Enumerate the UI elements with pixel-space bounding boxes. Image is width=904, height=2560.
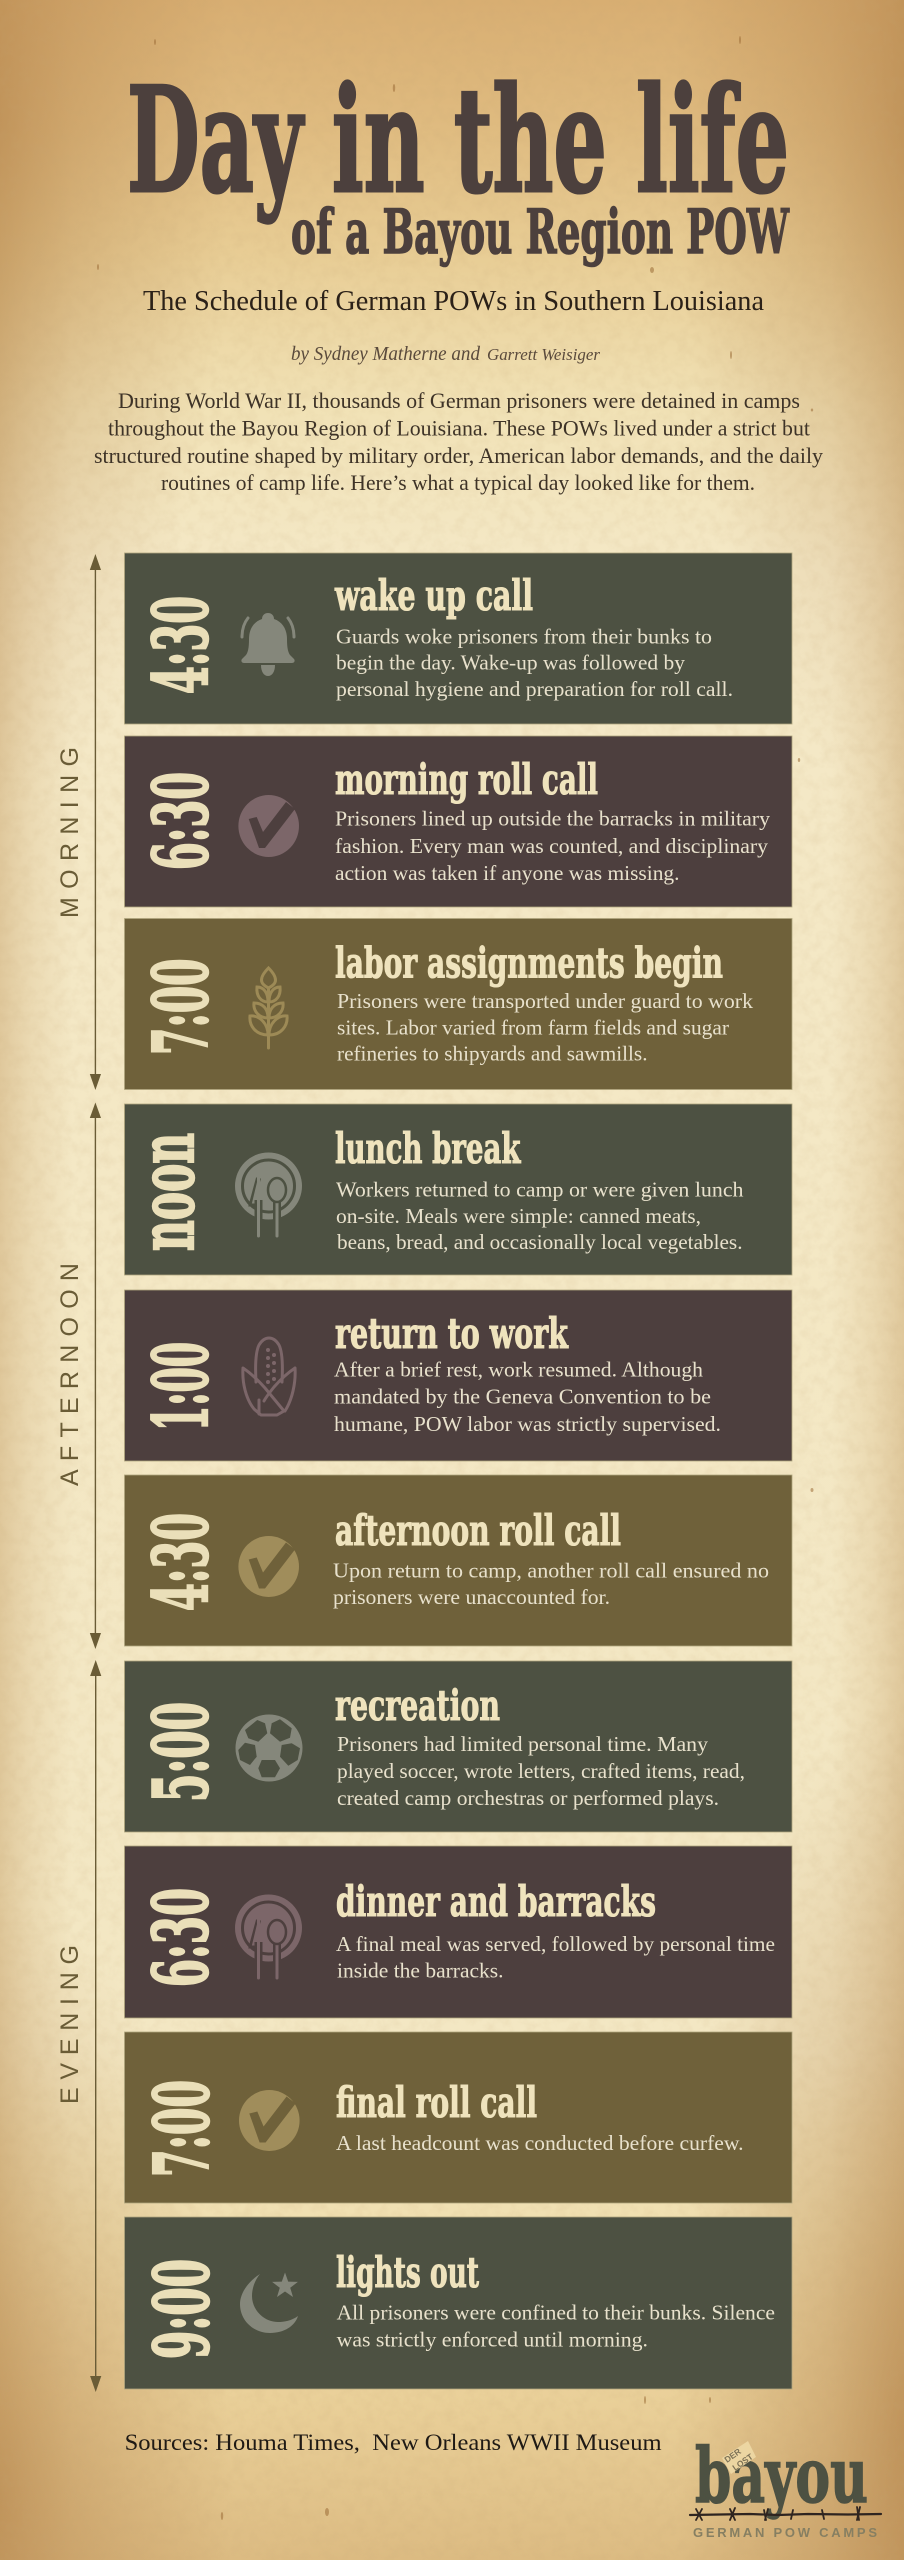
barbed wire (690, 2507, 881, 2520)
icon: check mark (238, 1536, 299, 1597)
panel: final roll call: 7:00 (138, 2080, 226, 2177)
description: created camp orchestras or performed plays. (337, 1786, 719, 1810)
description: action was taken if anyone was missing. (335, 861, 680, 885)
panel: morning roll call: 6:30 (137, 772, 225, 870)
icon: check mark (238, 795, 299, 857)
icon: corn (243, 1338, 295, 1415)
panel: lights out: 9:00 (138, 2259, 226, 2359)
description (337, 1732, 745, 1810)
panel: final roll call (124, 2032, 792, 2203)
icon: wheat (250, 968, 287, 1048)
description (337, 989, 753, 1066)
description: Prisoners had limited personal time. Many (337, 1732, 708, 1756)
arrow: morning (90, 554, 101, 1090)
arrow: afternoon (90, 1102, 101, 1649)
icon: plate and cutlery (235, 1894, 302, 1978)
description (333, 1558, 769, 1609)
description (335, 807, 770, 885)
panel: morning roll call (124, 736, 792, 907)
description: prisoners were unaccounted for. (333, 1585, 610, 1609)
description: Prisoners lined up outside the barracks in military (335, 807, 770, 831)
label: morning: MORNING (56, 747, 84, 918)
description (336, 625, 733, 701)
icon: check mark (239, 2090, 300, 2151)
description: All prisoners were confined to their bunks. Silence (337, 2301, 775, 2325)
logo tagline patch: DER (722, 2446, 743, 2465)
intro paragraph: throughout the Bayou Region of Louisiana. These POWs lived under a strict but (108, 416, 811, 440)
panel: wake up call: 4:30 (137, 596, 225, 694)
intro paragraph: routines of camp life. Here’s what a typical day looked like for them. (161, 470, 755, 495)
heading: afternoon roll call (335, 1506, 621, 1555)
description: mandated by the Geneva Convention to be (334, 1385, 711, 1409)
description: beans, bread, and occasionally local vegetables. (337, 1230, 742, 1254)
intro paragraph: structured routine shaped by military order, American labor demands, and the daily (94, 443, 824, 468)
description: fashion. Every man was counted, and disciplinary (335, 834, 768, 858)
description: played soccer, wrote letters, crafted items, read, (337, 1759, 745, 1783)
heading: lights out (336, 2248, 479, 2297)
heading: return to work (335, 1309, 569, 1358)
icon: moon and star (240, 2272, 298, 2333)
description: Workers returned to camp or were given lunch (336, 1177, 744, 1201)
description: sites. Labor varied from farm fields and sugar (337, 1016, 729, 1040)
description: Upon return to camp, another roll call ensured no (333, 1558, 769, 1582)
description (336, 1177, 744, 1254)
description: personal hygiene and preparation for roll call. (336, 677, 733, 701)
intro paragraph (94, 388, 824, 495)
logo: der lost bayou (690, 2431, 881, 2540)
panel: labor assignments begin: 7:00 (137, 958, 225, 1055)
panel: dinner and barracks (124, 1846, 792, 2018)
panel: return to work: 1:00 (137, 1342, 225, 1431)
intro paragraph: During World War II, thousands of German prisoners were detained in camps (118, 388, 800, 413)
description: After a brief rest, work resumed. Although (334, 1357, 703, 1381)
description: Prisoners were transported under guard to work (337, 989, 753, 1013)
heading: morning roll call (335, 755, 598, 804)
panel: lights out (124, 2217, 792, 2389)
panel: lunch break: noon (123, 1133, 211, 1251)
label: evening: EVENING (56, 1945, 84, 2104)
description: refineries to shipyards and sawmills. (337, 1042, 648, 1066)
heading: labor assignments begin (335, 938, 723, 988)
description: humane, POW labor was strictly supervised. (334, 1412, 721, 1436)
sources: Sources: Houma Times, New Orleans WWII Museum (125, 2430, 662, 2455)
panel: labor assignments begin (124, 918, 792, 1090)
description: begin the day. Wake-up was followed by (336, 651, 685, 675)
logo tagline patch: LOST (730, 2451, 755, 2473)
heading: dinner and barracks (336, 1877, 656, 1926)
description: A last headcount was conducted before curfew. (336, 2131, 744, 2155)
description: inside the barracks. (337, 1959, 504, 1983)
byline: Garrett Weisiger (487, 345, 600, 364)
panel: afternoon roll call: 4:30 (137, 1513, 225, 1611)
byline: by Sydney Matherne and (291, 343, 481, 365)
description: Guards woke prisoners from their bunks to (336, 625, 712, 649)
heading: final roll call (336, 2078, 537, 2127)
arrow: evening (90, 1660, 101, 2392)
icon: plate and cutlery (235, 1152, 302, 1236)
panel: return to work (124, 1290, 792, 1461)
icon: soccer ball (236, 1714, 302, 1782)
description (337, 2301, 775, 2351)
panel: recreation (124, 1661, 792, 1832)
label: afternoon: AFTERNOON (56, 1263, 84, 1486)
heading: recreation (335, 1681, 500, 1730)
description (336, 1932, 775, 1983)
description (334, 1357, 721, 1436)
logo subtitle: GERMAN POW CAMPS (693, 2525, 877, 2540)
panel: dinner and barracks: 6:30 (137, 1888, 225, 1987)
panel: recreation: 5:00 (137, 1702, 225, 1802)
logo tagline patch (722, 2441, 756, 2474)
icon: bell (241, 613, 295, 676)
heading: wake up call (334, 571, 533, 620)
heading: lunch break (335, 1124, 521, 1173)
byline (291, 343, 600, 365)
description: A final meal was served, followed by personal time (336, 1932, 775, 1956)
panel: afternoon roll call (124, 1475, 792, 1646)
description: on-site. Meals were simple: canned meats, (336, 1204, 701, 1228)
panel: lunch break (123, 1104, 792, 1275)
subtitle: The Schedule of German POWs in Southern Louisiana (143, 285, 764, 317)
description: was strictly enforced until morning. (337, 2327, 648, 2351)
panel: wake up call (124, 553, 792, 724)
